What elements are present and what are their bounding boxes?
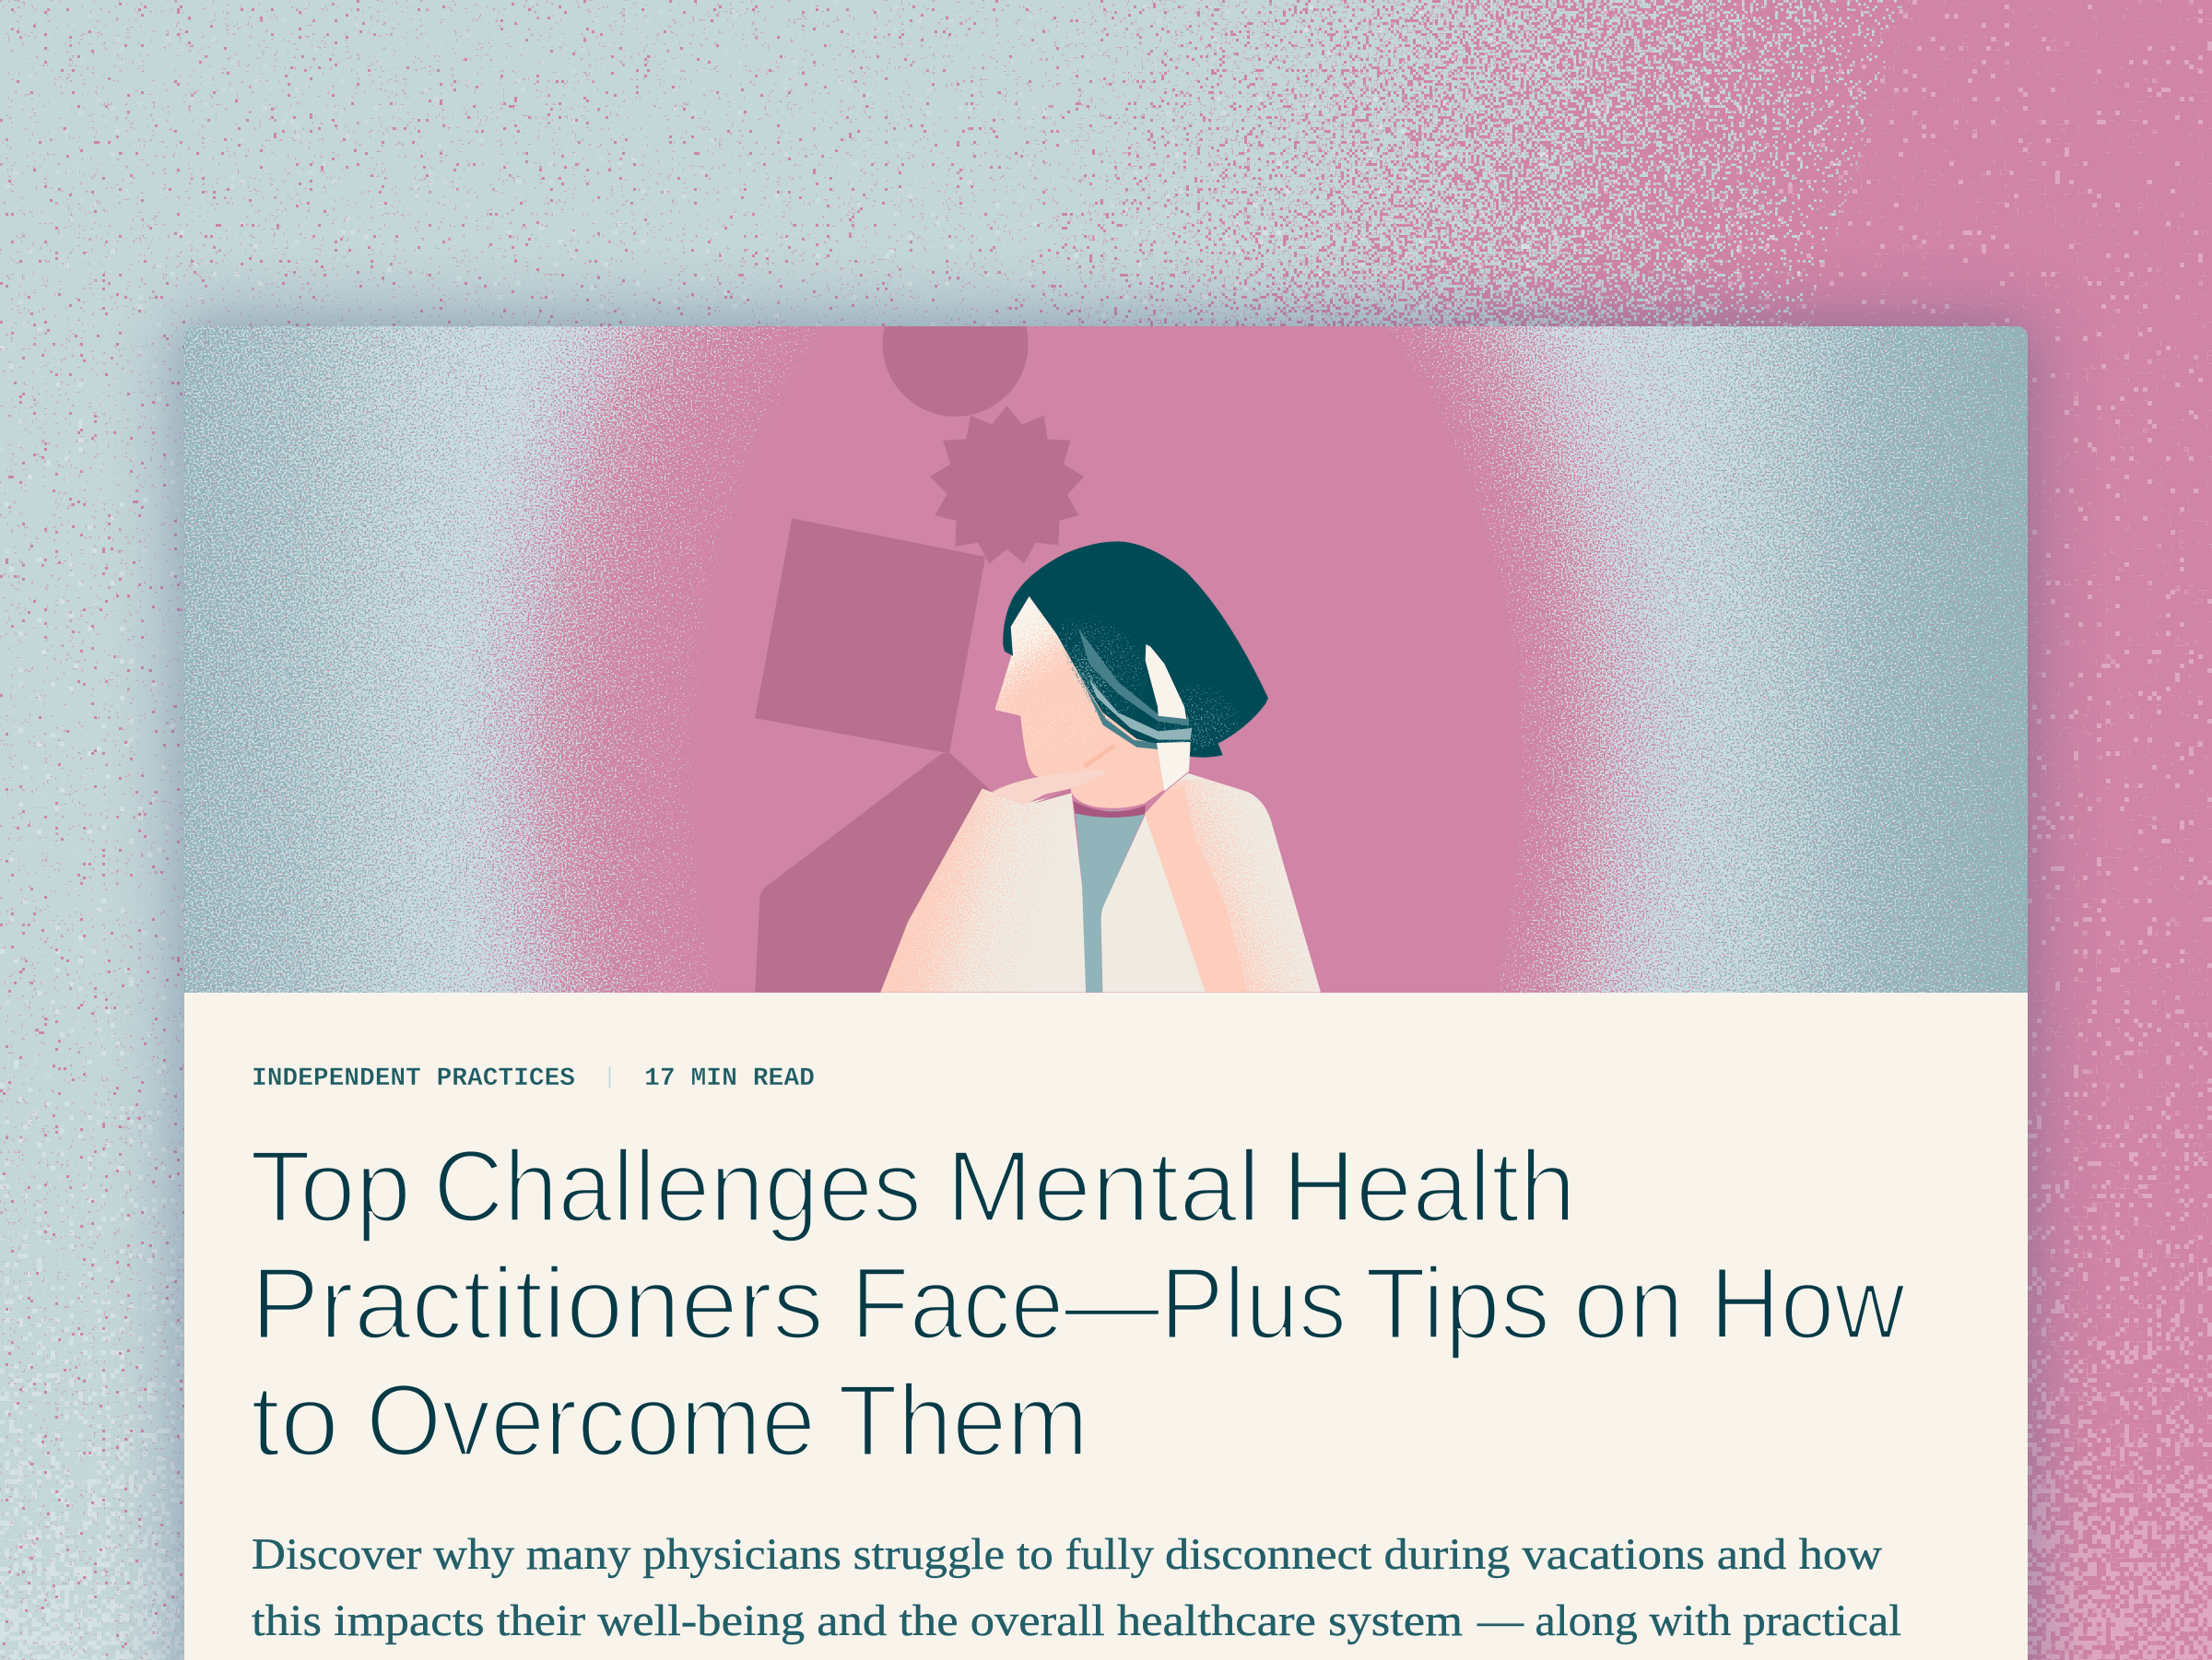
title line 2: Tips [1365,1247,1550,1360]
pink grainy spotlight [184,326,2028,993]
collar band [1073,801,1146,818]
starburst shape [930,406,1084,564]
title line 1: Top [250,1130,411,1243]
fingers [993,770,1106,805]
title line 1: Challenges [433,1130,922,1243]
article card [184,326,2028,1660]
title line 1: Health [1282,1130,1576,1243]
title line 3: Overcome [366,1364,816,1478]
meta row [252,1065,815,1093]
title line 1 [250,1130,1576,1243]
jaw line [1085,745,1115,767]
backdrop shapes [755,271,1084,993]
ear piece [1146,644,1186,719]
title [250,1130,1906,1478]
strand dark upper [1078,629,1189,725]
title line 2: Face—Plus [851,1247,1347,1360]
neck hair highlight [1157,742,1191,791]
circle shape [883,271,1029,417]
forearm [1145,785,1248,993]
hair strand grain [995,525,1290,774]
meta divider [608,1066,610,1088]
intro line 1: disconnect during vacations and how [1165,1530,1882,1579]
arm peach grain [1145,776,1322,993]
tilted square shape [755,518,985,753]
teal grain [184,326,2028,993]
title line 3: Them [838,1364,1088,1478]
category label: INDEPENDENT PRACTICES [252,1065,575,1093]
hero illustration panel [184,326,2028,993]
strand light [1089,679,1192,740]
face and neck [994,596,1164,808]
title line 2: on [1573,1247,1684,1360]
coat left peach grain [830,774,1124,995]
title line 1: Mental [946,1130,1261,1243]
intro line 2: — along with practical [1477,1596,1901,1645]
title line 2 [251,1247,1906,1360]
hero background base [184,326,2028,993]
title line 3: to [251,1364,339,1478]
title line 2: How [1710,1247,1906,1360]
coat right panel [1101,773,1321,993]
silhouette shape [755,752,994,993]
hand shadow [1033,789,1071,804]
hair [1003,541,1268,758]
intro line 1: Discover why many physicians struggle to fully [252,1530,1154,1579]
intro paragraph [252,1530,1901,1645]
intro line 1 [252,1530,1882,1579]
woman figure [880,541,1321,993]
coat left panel [880,789,1086,993]
forehead highlight [977,571,1161,756]
strand dark lower [1085,685,1187,750]
shirt [1076,811,1145,993]
title line 3 [251,1364,1088,1478]
read time: 17 MIN READ [644,1065,815,1093]
intro line 2: this impacts their well-being and the overall healthcare system [252,1596,1463,1645]
intro line 2 [252,1596,1901,1645]
title line 2: Practitioners [251,1247,824,1360]
